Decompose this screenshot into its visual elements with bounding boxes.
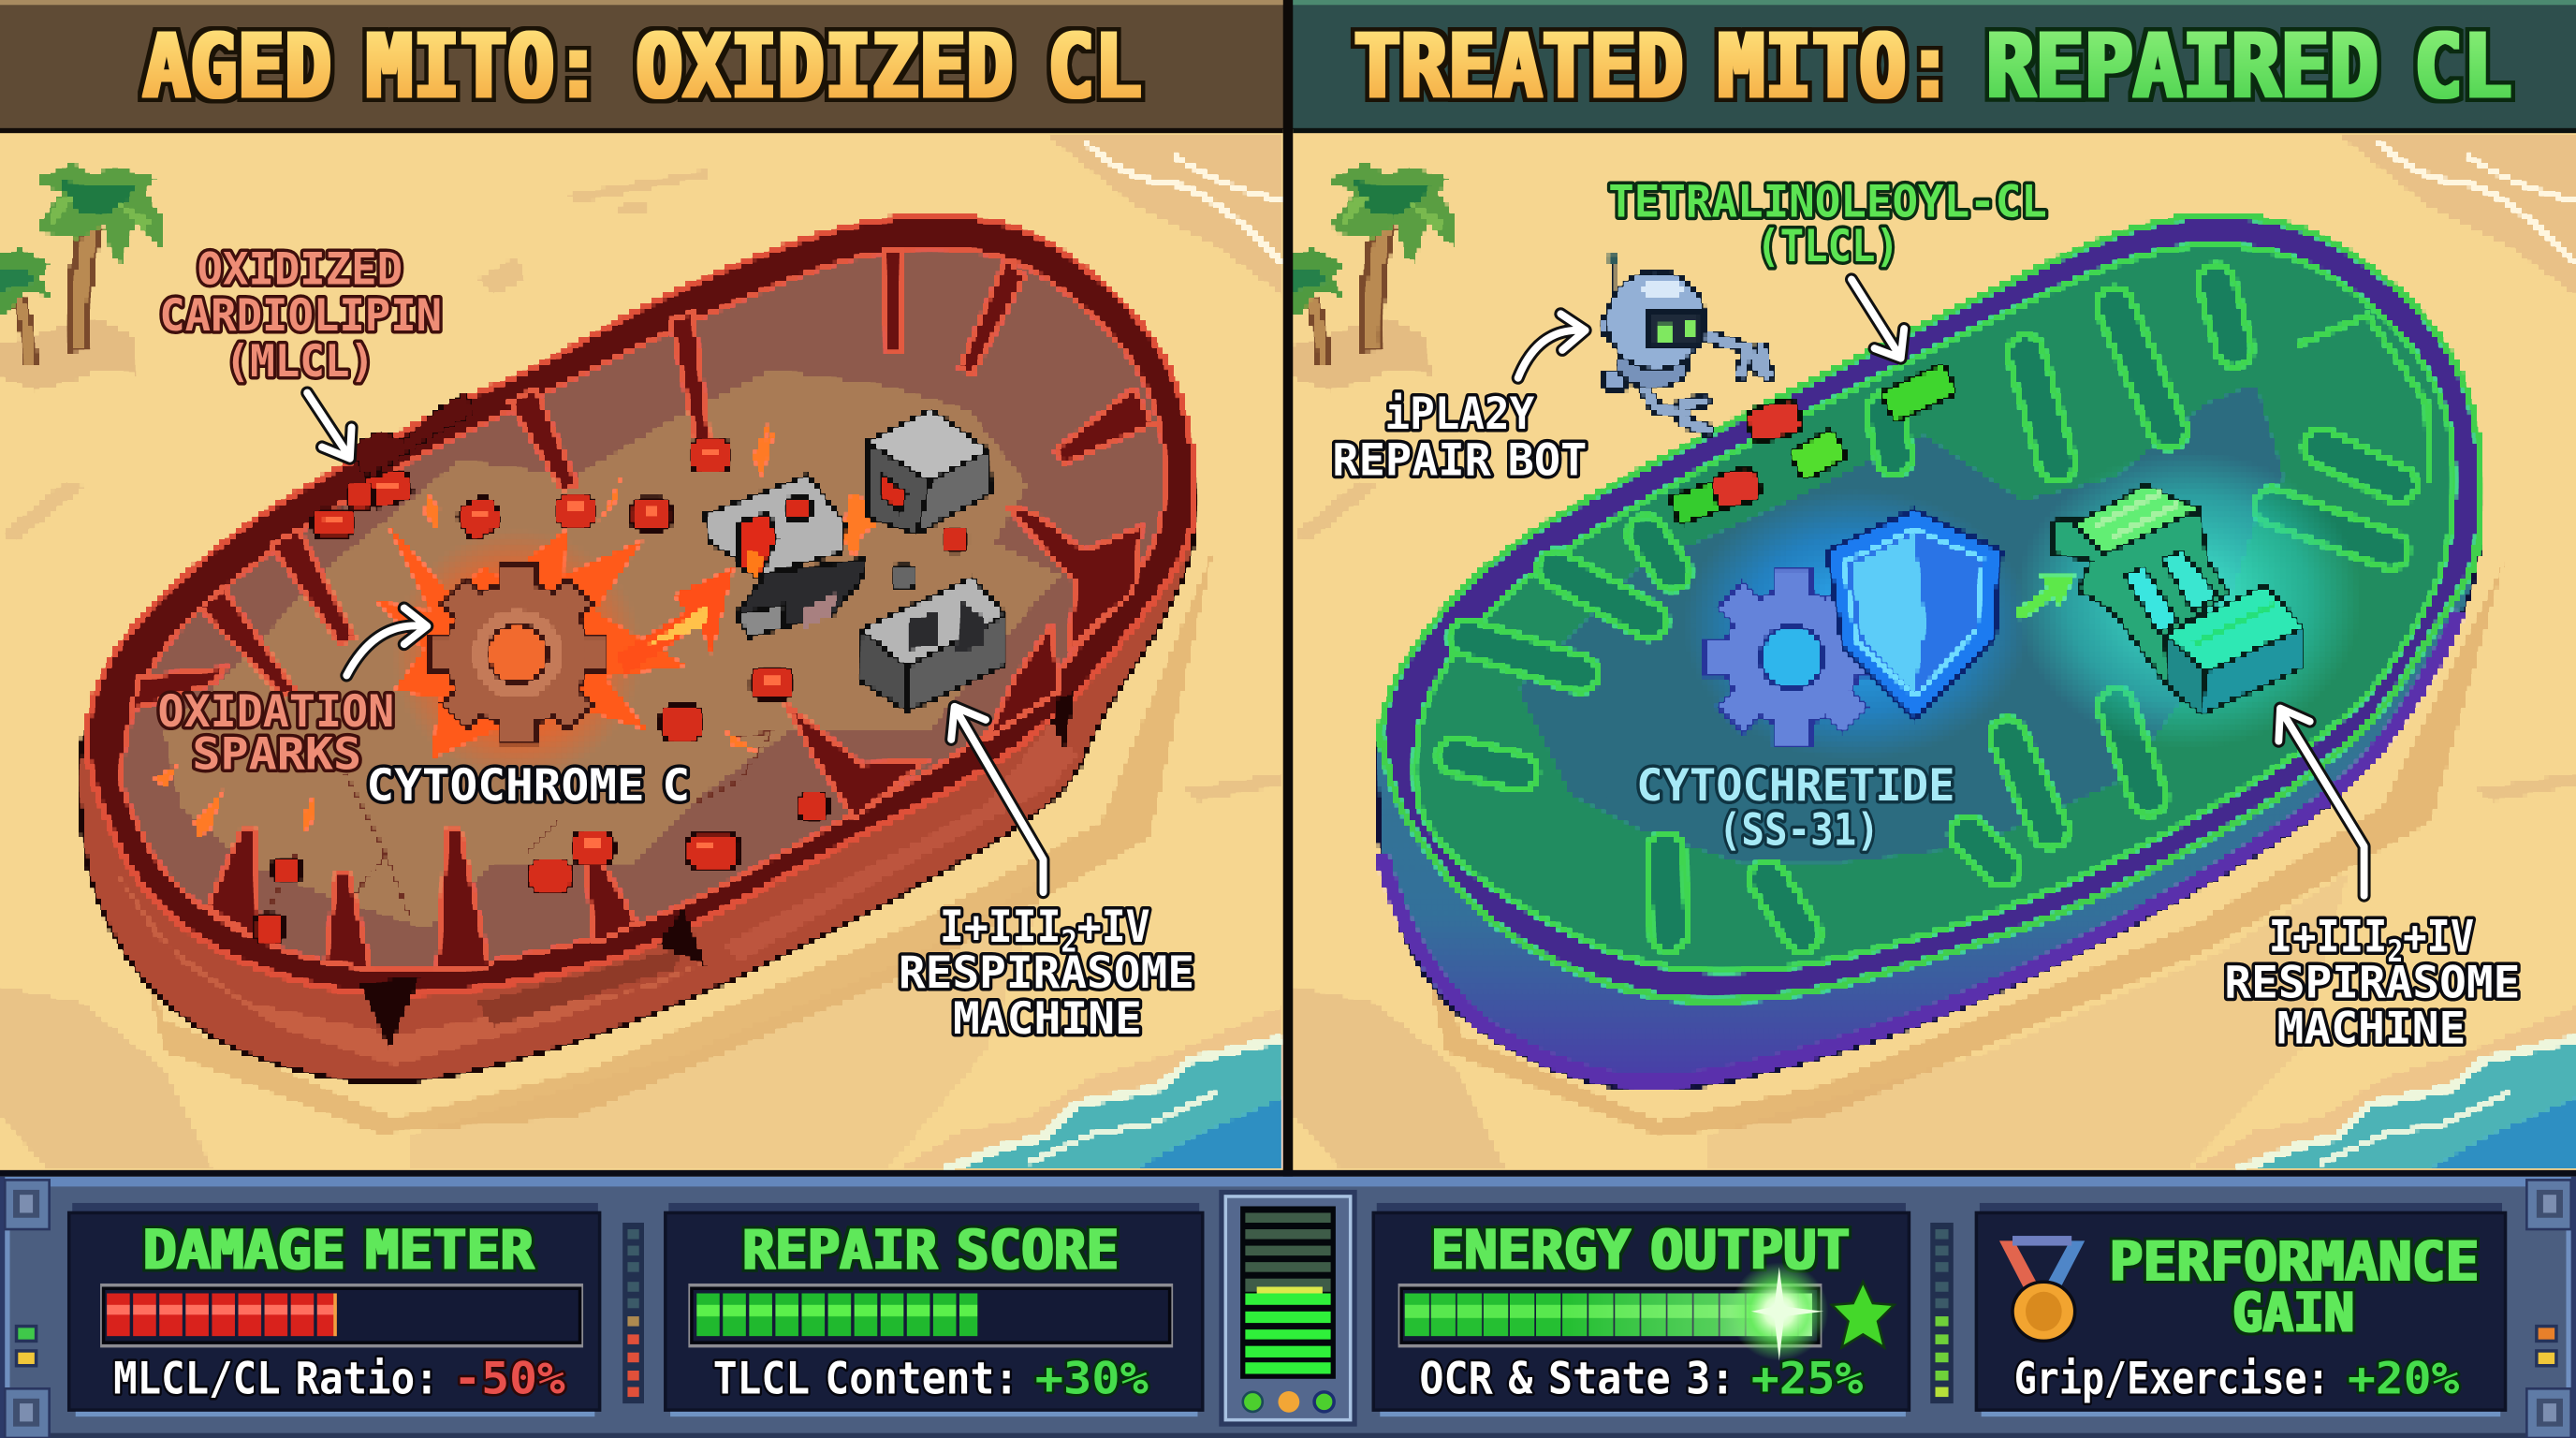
arrow: tetralinoleoyl cardiolipin — [1852, 279, 1904, 359]
arrow: treated respirasome — [2278, 709, 2364, 896]
HUD console — [0, 1170, 2576, 1438]
mitochondrion: right chamber outline — [2297, 315, 2430, 481]
LED strip: green — [1930, 1223, 1954, 1403]
LED strip: red — [622, 1223, 644, 1403]
label: treated respirasome machine: MACHINE — [2277, 1004, 2466, 1055]
palm trees — [1293, 163, 1454, 391]
stat: ocr and state 3: OCR & State 3: — [1419, 1354, 1734, 1405]
panel: repair score — [666, 1203, 1203, 1416]
mitochondrion: purple base edge — [1382, 611, 2459, 1081]
left bolt brackets — [0, 1177, 50, 1438]
label: oxidized cardiolipin — [159, 244, 442, 388]
energy flare — [1730, 1262, 1828, 1360]
floor cracks — [263, 731, 772, 920]
mitochondrion: damaged cristae wedges — [131, 250, 1153, 970]
wet sand and surf, top right — [2336, 133, 2576, 296]
icon: SS-31 shield — [1827, 509, 2001, 720]
label: treated respirasome machine: RESPIRASOME — [2224, 958, 2520, 1009]
stat: grip and exercise: +20% — [2348, 1354, 2460, 1405]
membrane lipids: green repaired, red damaged — [1669, 363, 1957, 525]
stat: mlcl/cl ratio: -50% — [453, 1354, 565, 1405]
panel: damage meter — [69, 1203, 600, 1416]
arrow: repair bot — [1518, 314, 1586, 378]
icon: lightning bolt — [616, 567, 735, 677]
stat: tlcl content: TLCL Content: — [713, 1354, 1018, 1405]
label: tetralinoleoyl cardiolipin — [1608, 177, 2047, 272]
icon: damaged cytochrome c gear — [429, 565, 607, 742]
stat: grip and exercise: Grip/Exercise: — [2014, 1354, 2330, 1405]
mitochondrion: base cracks — [359, 690, 1076, 1049]
oxidized lipid lumps — [255, 439, 968, 944]
label: oxidation sparks: OXIDATION — [157, 686, 394, 738]
icon: protected cytochrome gear — [1704, 568, 1881, 746]
label: treated respirasome machine: +IV — [2403, 911, 2474, 962]
mitochondrion: base wall — [79, 215, 1197, 1082]
sand ripples — [1293, 480, 2576, 1170]
left status LEDs — [15, 1325, 37, 1367]
label: treated respirasome machine: I+III — [2269, 911, 2402, 962]
heading: damage meter: DAMAGE METER — [143, 1218, 534, 1282]
label: cytochretide — [1636, 760, 1955, 856]
machine: upper grey block — [868, 409, 990, 535]
icon: repair bot — [1600, 255, 1767, 431]
label: repair bot: iPLA2Y — [1385, 389, 1535, 440]
palm trees — [0, 163, 161, 391]
teal machine glow — [2016, 452, 2361, 748]
title: treated: REPAIRED CL — [1986, 16, 2512, 119]
icon: medal — [1999, 1236, 2085, 1341]
small oxidation sparks — [151, 414, 896, 838]
label: aged respirasome machine: 2 — [1061, 925, 1077, 959]
header: aged — [0, 0, 1283, 133]
label: aged respirasome machine — [899, 902, 1194, 1045]
stat: mlcl/cl ratio: MLCL/CL Ratio: — [113, 1354, 439, 1405]
label: oxidized cardiolipin: (MLCL) — [225, 336, 374, 388]
heading: performance gain — [2110, 1229, 2479, 1344]
label: tetralinoleoyl cardiolipin: TETRALINOLEOYL-CL — [1608, 177, 2047, 228]
panel art: treated mitochondrion on the beach — [1288, 128, 2576, 1180]
ocean, bottom right — [896, 1005, 1283, 1170]
label: oxidized cardiolipin: CARDIOLIPIN — [159, 290, 442, 342]
bar: energy — [1398, 1284, 1822, 1347]
bar: damage — [100, 1284, 583, 1347]
machine: broken middle block — [705, 475, 866, 638]
icon: star — [1832, 1282, 1895, 1347]
mitochondrion: inner floor — [1414, 244, 2454, 972]
label: treated respirasome machine: 2 — [2387, 935, 2403, 969]
center energy gauge — [1219, 1190, 1357, 1427]
label: oxidized cardiolipin: OXIDIZED — [198, 244, 402, 296]
blue glow — [1684, 490, 2029, 759]
machine: lower grey block — [859, 577, 1005, 712]
mitochondrion: cristae fold interiors — [1456, 283, 2398, 933]
label: tetralinoleoyl cardiolipin: (TLCL) — [1756, 221, 1899, 272]
arrow: oxidation sparks — [346, 608, 427, 675]
mitochondrion: tan centre — [165, 370, 1060, 929]
sand background — [1288, 128, 2576, 1180]
explosion glow — [392, 529, 642, 779]
title: treated — [1354, 16, 2512, 119]
label: aged respirasome machine: +IV — [1077, 902, 1150, 953]
label: oxidation sparks: SPARKS — [192, 729, 361, 781]
mitochondrion: torn outer membrane — [348, 391, 473, 477]
label: treated respirasome machine — [2224, 911, 2520, 1055]
mitochondrion: rim and purple membrane — [1381, 215, 2481, 1001]
header: treated — [1293, 0, 2576, 133]
mitochondrion: inner floor — [122, 248, 1165, 970]
right bolt brackets — [2526, 1177, 2576, 1438]
panel: energy output — [1373, 1203, 1909, 1416]
label: aged respirasome machine: I+III — [940, 902, 1074, 953]
heading: repair score: REPAIR SCORE — [742, 1218, 1119, 1282]
mitochondrion: green cristae folds — [1456, 283, 2398, 933]
label: aged respirasome machine: MACHINE — [953, 993, 1142, 1045]
sand ripples — [0, 169, 1283, 1170]
sand background — [0, 128, 1288, 1180]
icon: treated respirasome machine — [2054, 485, 2304, 715]
label: oxidation sparks — [157, 686, 394, 781]
gauge indicator pips — [1243, 1391, 1334, 1413]
explosion burst — [374, 522, 687, 759]
bar: repair — [688, 1284, 1173, 1347]
right status LEDs — [2535, 1325, 2558, 1367]
panel art: aged mitochondrion on the beach — [0, 128, 1288, 1180]
label: repair bot — [1332, 389, 1587, 486]
wet sand and surf, top right — [1043, 133, 1283, 296]
mitochondrion: base wall — [1377, 215, 2482, 1090]
label: aged respirasome machine: RESPIRASOME — [899, 947, 1194, 999]
panel: performance gain — [1976, 1203, 2506, 1416]
arrow: aged respirasome — [951, 707, 1043, 892]
label: cytochretide: CYTOCHRETIDE — [1636, 760, 1955, 812]
heading: performance gain: PERFORMANCE — [2110, 1229, 2479, 1293]
heading: energy output: ENERGY OUTPUT — [1431, 1218, 1850, 1282]
mitochondrion: ground shadow — [98, 542, 1216, 1134]
stat: ocr and state 3: +25% — [1751, 1354, 1864, 1405]
mitochondrion: outer rim and dark membrane — [87, 215, 1195, 994]
mitochondrion: ground shadow — [1397, 559, 2506, 1137]
label: cytochretide: (SS-31) — [1719, 804, 1880, 856]
label: cytochrome c: CYTOCHROME C — [366, 760, 690, 812]
machine debris — [892, 565, 915, 588]
title: aged: AGED MITO: OXIDIZED CL — [143, 16, 1142, 119]
ocean, bottom right — [2188, 1005, 2576, 1170]
arrow: oxidized cardiolipin — [307, 393, 352, 459]
mitochondrion: blue centre — [1528, 394, 2276, 855]
label: repair bot: REPAIR BOT — [1332, 434, 1587, 486]
title: treated: TREATED MITO: — [1354, 16, 1954, 119]
stat: tlcl content: +30% — [1035, 1354, 1149, 1405]
panel divider — [1283, 0, 1293, 1177]
heading: performance gain: GAIN — [2232, 1281, 2354, 1344]
icon: green arrow to machine — [2014, 575, 2075, 622]
